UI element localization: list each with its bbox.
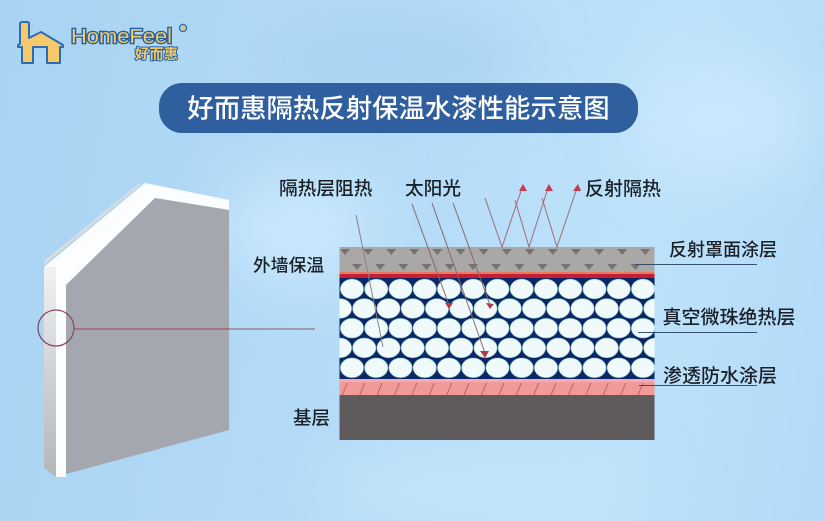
label: 渗透防水涂层: 渗透防水涂层 — [663, 365, 777, 387]
title banner — [159, 83, 638, 133]
wall side face — [44, 267, 56, 477]
arrows: heat and sunlight rays — [356, 184, 581, 358]
icon: house — [18, 22, 63, 63]
layer: reflective coating — [340, 247, 654, 272]
logo: HomeFeel — [18, 22, 187, 63]
logo registered mark: R — [181, 26, 186, 32]
layer: waterproof coating — [340, 379, 654, 395]
label: 真空微珠绝热层: 真空微珠绝热层 — [662, 306, 796, 328]
arrows: incoming sunlight — [412, 203, 494, 358]
wall white insulation layer — [44, 183, 229, 477]
logo chinese name: 好而惠 — [135, 46, 178, 62]
layered cross-section diagram — [328, 247, 667, 440]
label: 外墙保温: 外墙保温 — [253, 256, 324, 276]
label: 太阳光: 太阳光 — [405, 178, 461, 199]
label: 反射罩面涂层: 反射罩面涂层 — [669, 240, 777, 260]
layer: base — [340, 395, 654, 440]
title text: 好而惠隔热反射保温水漆性能示意图 — [187, 94, 610, 124]
leader lines — [635, 264, 757, 386]
wall top shadow edge — [44, 183, 143, 265]
logo registered mark — [179, 24, 187, 32]
wall grey face — [66, 198, 229, 474]
layer: vacuum microbeads — [328, 278, 667, 379]
label: 基层: 基层 — [293, 408, 330, 428]
label: 隔热层阻热: 隔热层阻热 — [279, 178, 373, 199]
wall illustration — [44, 183, 229, 477]
callout: wall detail circle and leader — [38, 310, 315, 346]
logo wordmark: HomeFeel — [71, 26, 172, 48]
layer: red band — [340, 272, 654, 278]
arrows: reflected rays — [485, 184, 581, 247]
label: 反射隔热: 反射隔热 — [585, 178, 661, 200]
arrow: insulation layer ray — [356, 215, 383, 347]
